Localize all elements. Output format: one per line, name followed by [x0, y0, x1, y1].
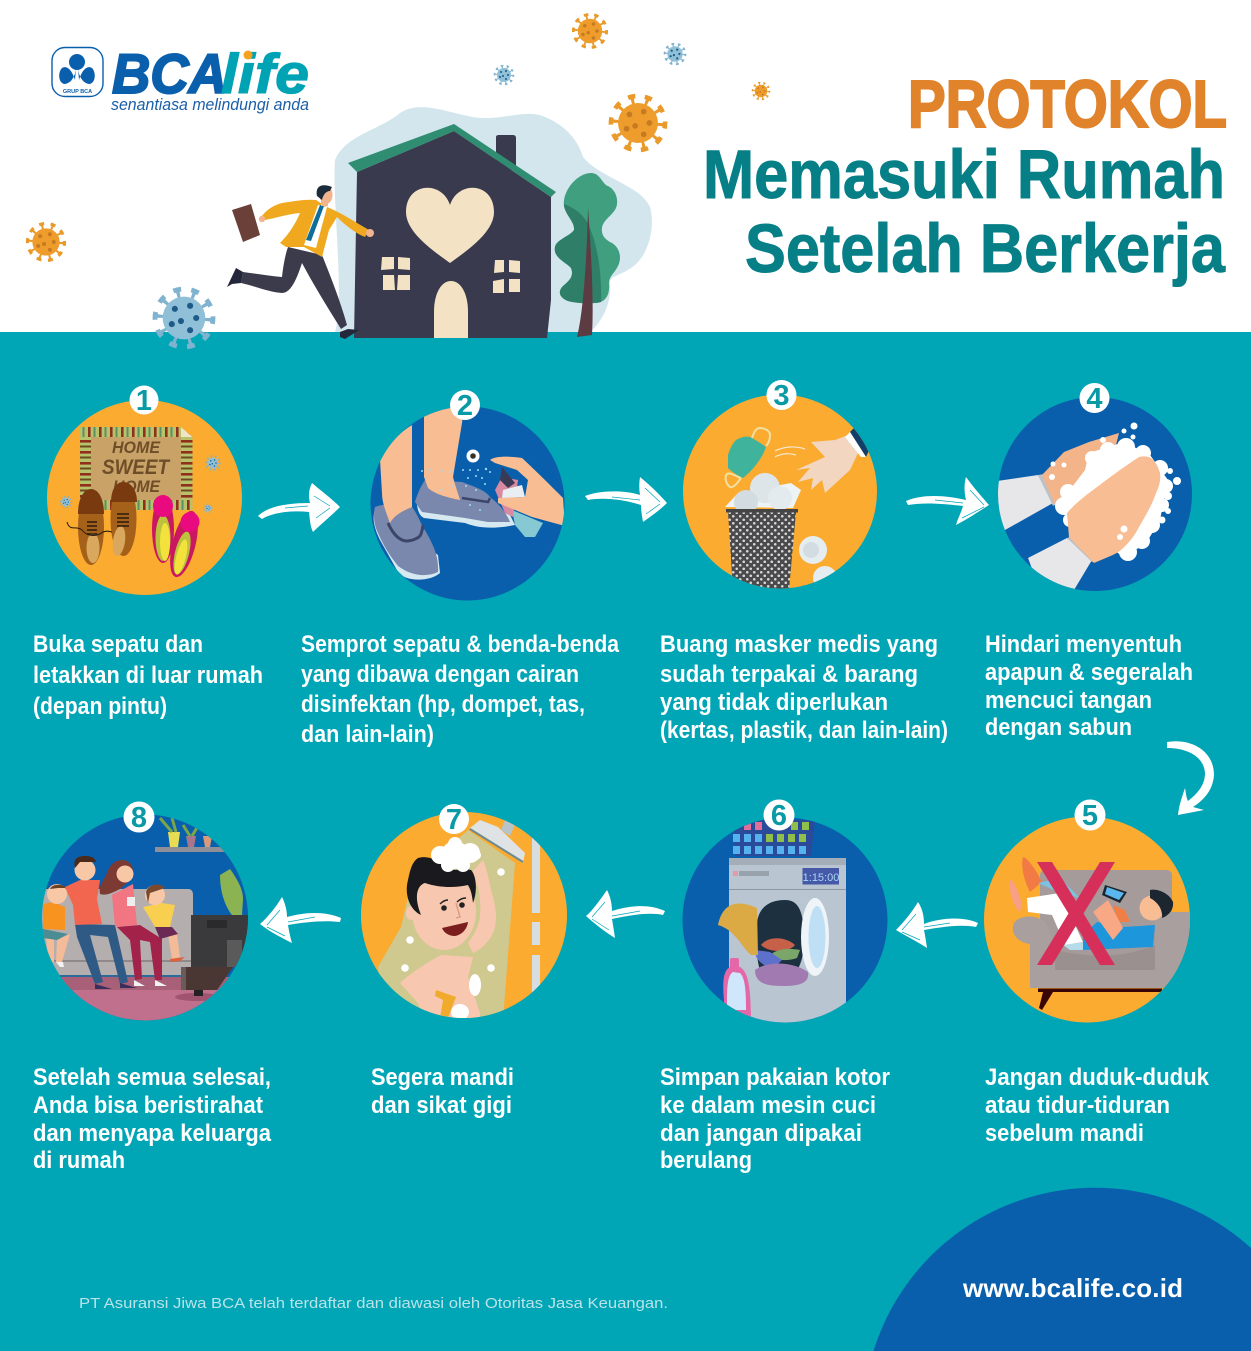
circle background [361, 812, 567, 1018]
caption 1: Buka sepatu dan [33, 631, 203, 658]
number badge 4 [1080, 383, 1110, 415]
circle background [984, 816, 1190, 1022]
sleeve [850, 428, 868, 457]
doormat: SWEET [102, 456, 171, 479]
detergent bottle [723, 958, 751, 1017]
left leg [380, 425, 412, 523]
arrow 6 [586, 890, 665, 938]
back shoe sole [374, 510, 440, 580]
caption 5: atau tidur-tiduran [985, 1092, 1170, 1119]
number badge 8: 8 [131, 802, 147, 834]
house plant [220, 869, 243, 915]
soap foam [1049, 422, 1181, 561]
decorative virus particles [27, 14, 770, 347]
number badge 2 [450, 390, 480, 422]
hero illustration: house and running man [227, 107, 652, 339]
caption 5: sebelum mandi [985, 1120, 1144, 1147]
circle background [682, 818, 888, 1022]
shelf and pots [155, 818, 225, 852]
step 1: shoes outside door [47, 385, 242, 595]
front shoe [415, 480, 510, 522]
step 8: family [40, 802, 251, 1025]
logo tagline: senantiasa melindungi anda [111, 96, 309, 114]
mini viruses [206, 456, 220, 470]
icon: BCA emblem: GRUP BCA [63, 89, 92, 95]
shower pipe and head [470, 818, 540, 995]
arrow 3 [906, 477, 989, 525]
number badge 5 [1074, 800, 1106, 832]
mother [100, 860, 167, 986]
windows [381, 257, 520, 293]
circle background [47, 400, 242, 595]
caption 8 [33, 1064, 272, 1174]
brown shoes [67, 482, 137, 565]
caption 6: berulang [660, 1147, 752, 1174]
water spray [378, 830, 515, 1020]
caption 1 [33, 631, 263, 720]
icon: BCA emblem [52, 48, 103, 96]
front hand [1067, 456, 1160, 563]
sleeves [998, 475, 1052, 530]
number badge 5: 5 [1082, 800, 1098, 832]
number badge 7 [439, 804, 469, 836]
caption 7: Segera mandi [371, 1064, 514, 1091]
raised arm [468, 860, 496, 953]
teal background panel [0, 332, 1251, 1351]
paper balls [725, 473, 837, 590]
caption 8: dan menyapa keluarga [33, 1120, 272, 1147]
step 3: discard mask [683, 380, 877, 590]
number badge 1: 1 [136, 385, 152, 417]
number badge 6 [764, 800, 794, 832]
caption 1: letakkan di luar rumah [33, 662, 263, 689]
logo wordmark BCA: BCA [112, 42, 227, 105]
head [412, 874, 476, 950]
doormat [80, 427, 192, 510]
floor [40, 977, 250, 1025]
mask [728, 437, 766, 478]
caption 2: disinfektan (hp, dompet, tas, [301, 691, 585, 718]
front shoe sole [417, 505, 515, 528]
number badge 6: 6 [771, 800, 787, 832]
sofa [1013, 870, 1195, 1010]
tree [555, 173, 620, 337]
step 5: do not sit [984, 800, 1195, 1022]
arrow 2 [585, 477, 667, 522]
back hand [1042, 433, 1119, 506]
boy [43, 884, 70, 967]
bottle [512, 510, 543, 537]
caption 6: Simpan pakaian kotor [660, 1064, 890, 1091]
caption 8: Setelah semua selesai, [33, 1064, 271, 1091]
number badge 3: 3 [773, 380, 790, 412]
running man [227, 185, 374, 339]
germ icon [466, 450, 480, 462]
step captions row 1 [33, 631, 1193, 748]
caption 6 [660, 1064, 890, 1174]
sponge and bubbles [435, 974, 481, 1020]
hair [407, 857, 476, 915]
caption 5 [985, 1064, 1210, 1147]
laundry basket [733, 820, 815, 856]
doormat: HOME [113, 477, 161, 496]
pale blob [335, 107, 652, 332]
caption 6: ke dalam mesin cuci [660, 1092, 876, 1119]
caption 3: yang tidak diperlukan [660, 689, 888, 716]
mask straps [726, 428, 770, 487]
caption 2: dan lain-lain) [301, 721, 434, 748]
caption 2: Semprot sepatu & benda-benda [301, 631, 620, 658]
caption 3: (kertas, plastik, dan lain-lain) [660, 717, 948, 744]
back shoe [374, 504, 438, 575]
logo: BCA life [52, 42, 309, 114]
step 2: disinfect shoes [370, 390, 565, 600]
house wall [354, 131, 551, 338]
roof [348, 124, 556, 197]
caption 7 [371, 1064, 514, 1119]
hand [796, 435, 858, 493]
title [703, 67, 1227, 287]
body [400, 955, 480, 1022]
number badge 7: 7 [446, 804, 462, 836]
pink flats [152, 495, 203, 580]
sofa [42, 889, 193, 975]
caption 4: dengan sabun [985, 714, 1132, 741]
caption 5: Jangan duduk-duduk [985, 1064, 1210, 1091]
caption 4: Hindari menyentuh [985, 631, 1182, 658]
motion lines [775, 447, 805, 457]
hand [490, 457, 565, 526]
circle background [998, 397, 1192, 591]
caption 4 [985, 631, 1193, 741]
blue corner panel [874, 1188, 1251, 1351]
logo wordmark life: life [221, 42, 309, 105]
caption 1: (depan pintu) [33, 693, 167, 720]
right leg [424, 405, 464, 500]
circle background [370, 406, 564, 600]
face [440, 898, 468, 936]
drum and clothes [718, 898, 829, 986]
number badge 4: 4 [1086, 383, 1103, 415]
arrow 4: curved down [1167, 741, 1214, 815]
website url: www.bcalife.co.id [962, 1273, 1183, 1303]
arrow 5 [896, 902, 978, 948]
caption 6: dan jangan dipakai [660, 1120, 862, 1147]
caption 7: dan sikat gigi [371, 1092, 512, 1119]
arrow 7 [260, 897, 341, 943]
red cross [1037, 862, 1115, 965]
caption 8: Anda bisa beristirahat [33, 1092, 263, 1119]
number badge 2: 2 [457, 390, 473, 422]
shampoo foam [431, 837, 481, 872]
caption 4: apapun & segeralah [985, 659, 1193, 686]
caption 8: di rumah [33, 1147, 125, 1174]
caption 3: sudah terpakai & barang [660, 661, 918, 688]
timer display: 1:15:00 [803, 872, 839, 884]
heart [406, 188, 494, 263]
person lying [1010, 857, 1173, 950]
caption 3 [660, 631, 948, 744]
arrow 1 [258, 483, 340, 532]
television [175, 915, 251, 1001]
water drops [401, 868, 505, 972]
step 6: washing machine [682, 800, 888, 1033]
number badge 1 [130, 385, 158, 417]
step 4: wash hands [990, 383, 1192, 591]
spray dots [421, 468, 491, 511]
washer body [729, 858, 846, 1033]
number badge 3 [766, 380, 796, 412]
door [434, 281, 468, 338]
doormat: HOME [112, 438, 161, 457]
footer disclaimer: PT Asuransi Jiwa BCA telah terdaftar dan diawasi oleh Otoritas Jasa Keuangan. [79, 1295, 668, 1312]
caption 2: yang dibawa dengan cairan [301, 661, 579, 688]
circle background [683, 394, 877, 588]
chimney [496, 135, 516, 170]
number badge 8 [124, 802, 154, 834]
father [65, 856, 137, 989]
step 7: shower [361, 804, 567, 1022]
caption 4: mencuci tangan [985, 687, 1152, 714]
waste bin [728, 512, 796, 590]
caption 2 [301, 631, 620, 748]
circle background [42, 814, 248, 1020]
girl [143, 885, 185, 962]
caption 3: Buang masker medis yang [660, 631, 938, 658]
step captions row 2 [33, 1064, 1210, 1174]
